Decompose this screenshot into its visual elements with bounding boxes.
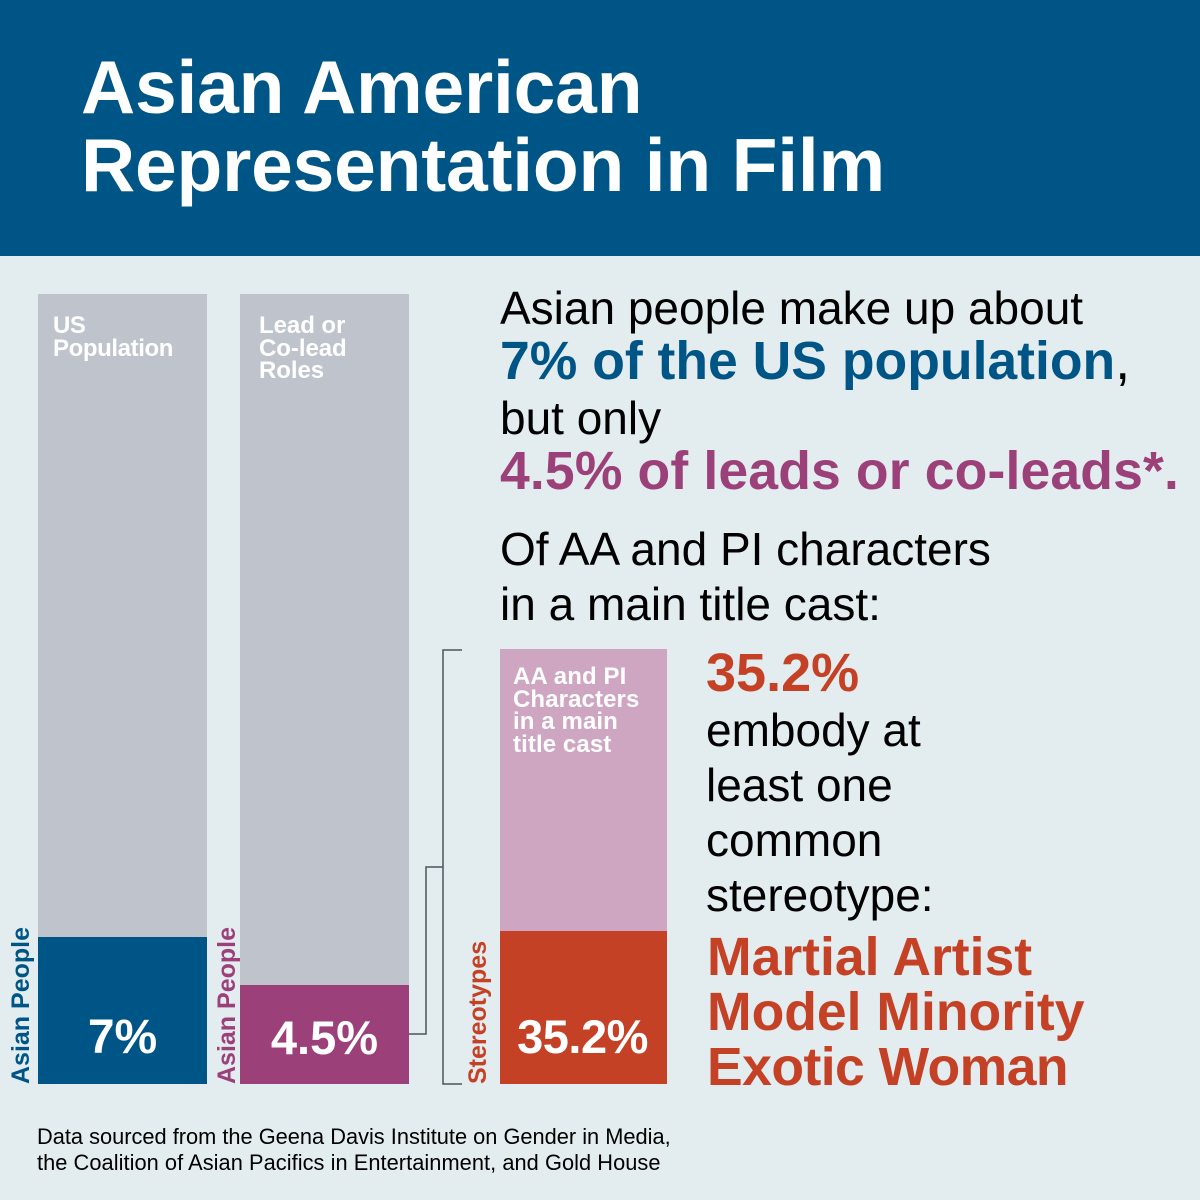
label: US population: Population (53, 334, 173, 362)
title: Asian American (81, 45, 642, 129)
label: lead or co-lead roles (259, 312, 347, 384)
line: but only: but only (500, 392, 661, 444)
list: stereotypes: Martial Artist (707, 928, 1032, 987)
segment: Asian people 4.5% (240, 985, 409, 1084)
text block: main title cast intro: in a main title cast: (500, 578, 881, 630)
side label: Asian People blue: Asian People (7, 927, 35, 1084)
label: AA and PI characters: AA and PI (513, 663, 626, 690)
title: Representation in Film (81, 123, 885, 207)
bar: AA and PI characters (500, 649, 667, 1084)
bracket connector (409, 649, 462, 1085)
label: lead or co-lead roles: Co-lead (259, 334, 347, 362)
value: 7%: 7% (88, 1011, 157, 1064)
text block: stereotype description: stereotype: (706, 869, 934, 921)
segment: Asian people 7% (38, 937, 207, 1084)
list: stereotypes: Model Minority (707, 983, 1084, 1042)
segment: stereotypes 35.2% (500, 931, 667, 1084)
label: AA and PI characters: title cast (513, 730, 611, 758)
label: AA and PI characters (513, 663, 639, 758)
title (81, 45, 885, 207)
line: intro: Asian people make up about (500, 282, 1083, 334)
text block: stereotype description: common (706, 814, 882, 866)
source note: Data sourced from the Geena Davis Institute on Gender in Media, (37, 1124, 671, 1149)
value: 35.2%: 35.2% (517, 1010, 648, 1063)
label: US population: US (53, 312, 86, 339)
text block: stereotype description: least one (706, 759, 893, 811)
stat: 35.2% heading: 35.2% (706, 643, 859, 703)
text block: stereotype description: embody at (706, 704, 921, 756)
text block: main title cast intro: Of AA and PI characters (500, 523, 991, 575)
line: 7% highlight: 7% of the US population, (500, 332, 1130, 391)
bar: lead or co-lead roles (240, 294, 409, 1084)
text block: stereotype description (706, 704, 934, 921)
value: 4.5%: 4.5% (271, 1011, 378, 1064)
line: 4.5% highlight: 4.5% of leads or co-leads*. (500, 442, 1179, 501)
text block: main title cast intro (500, 523, 991, 630)
header band (0, 0, 1200, 256)
label: US population (53, 312, 173, 362)
bar: US population (38, 294, 207, 1084)
label: lead or co-lead roles: Roles (259, 357, 324, 384)
label: lead or co-lead roles: Lead or (259, 312, 345, 339)
list: stereotypes (707, 928, 1084, 1097)
source note: the Coalition of Asian Pacifics in Entertainment, and Gold House (37, 1150, 661, 1175)
list: stereotypes: Exotic Woman (707, 1038, 1068, 1097)
side label: Stereotypes: Stereotypes (464, 941, 492, 1084)
source note (37, 1124, 671, 1175)
label: AA and PI characters: in a main (513, 708, 618, 735)
label: AA and PI characters: Characters (513, 686, 639, 712)
text block: population statement (500, 282, 1179, 501)
side label: Asian People purple: Asian People (213, 927, 241, 1084)
